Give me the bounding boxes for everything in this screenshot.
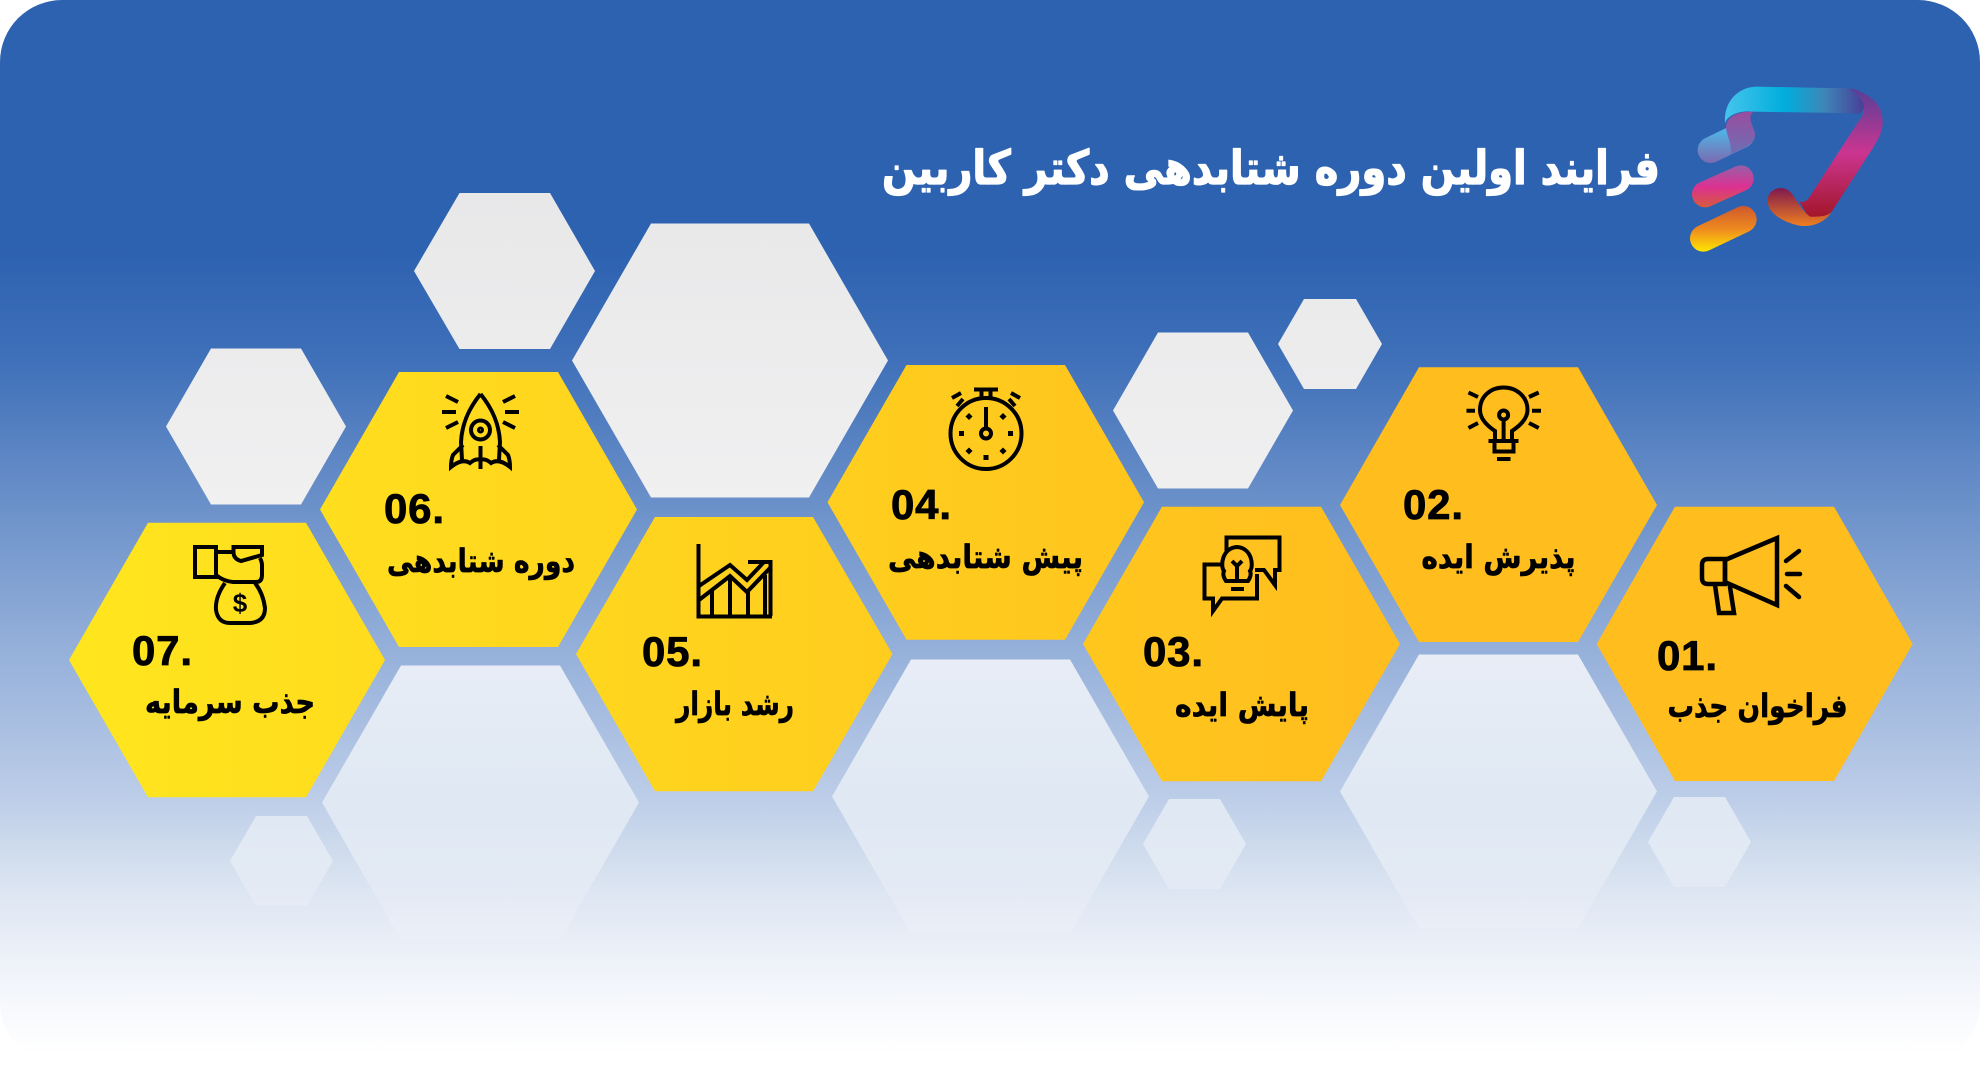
icon: hand holding money bag: $ (233, 588, 248, 618)
icon: hand holding money bag (195, 547, 265, 623)
logo (1703, 87, 1883, 238)
label 06: دوره شتابدهی (387, 542, 575, 580)
step 01: call for applications (1597, 507, 1913, 781)
icon: rocket (442, 394, 519, 469)
icon: stopwatch (950, 390, 1022, 469)
label 02: پذیرش ایده (1422, 538, 1576, 576)
label 03: پایش ایده (1175, 686, 1309, 724)
step 02: idea acceptance (1340, 367, 1657, 642)
step 03: idea monitoring (1083, 507, 1400, 781)
title: فرایند اولین دوره شتابدهی دکتر کاربین (882, 141, 1660, 196)
icon: megaphone (1702, 538, 1800, 613)
step 07: raise capital (69, 523, 385, 797)
label 01: فراخوان جذب (1668, 687, 1848, 725)
hexagon 03 (1083, 507, 1400, 781)
label 05: رشد بازار (674, 685, 794, 723)
label 07: جذب سرمایه (145, 683, 315, 721)
reflected hexagons: lower decoration (230, 654, 1751, 940)
grey hexagons: upper decoration (166, 193, 1382, 504)
number 01: 01. (1657, 632, 1717, 679)
hexagon 01 (1597, 507, 1913, 781)
hexagon 05 (576, 517, 892, 791)
step 04: pre-acceleration (828, 365, 1144, 640)
icon: growth chart (698, 544, 772, 616)
hexagon 02 (1340, 367, 1657, 642)
number 04: 04. (891, 481, 951, 528)
hexagon 07 (69, 523, 385, 797)
hexagon 04 (828, 365, 1144, 640)
step 05: market growth (576, 517, 892, 791)
step 06: acceleration course (320, 372, 637, 647)
hexagon 06 (320, 372, 637, 647)
number 05: 05. (642, 628, 702, 675)
number 06: 06. (384, 485, 444, 532)
number 07: 07. (132, 627, 192, 674)
icon: chat bubbles with bulb (1204, 538, 1280, 611)
stopwatch ticks (959, 413, 1013, 460)
label 04: پیش شتابدهی (888, 538, 1083, 576)
number 02: 02. (1403, 481, 1463, 528)
icon: light bulb (1466, 388, 1541, 459)
number 03: 03. (1143, 628, 1203, 675)
